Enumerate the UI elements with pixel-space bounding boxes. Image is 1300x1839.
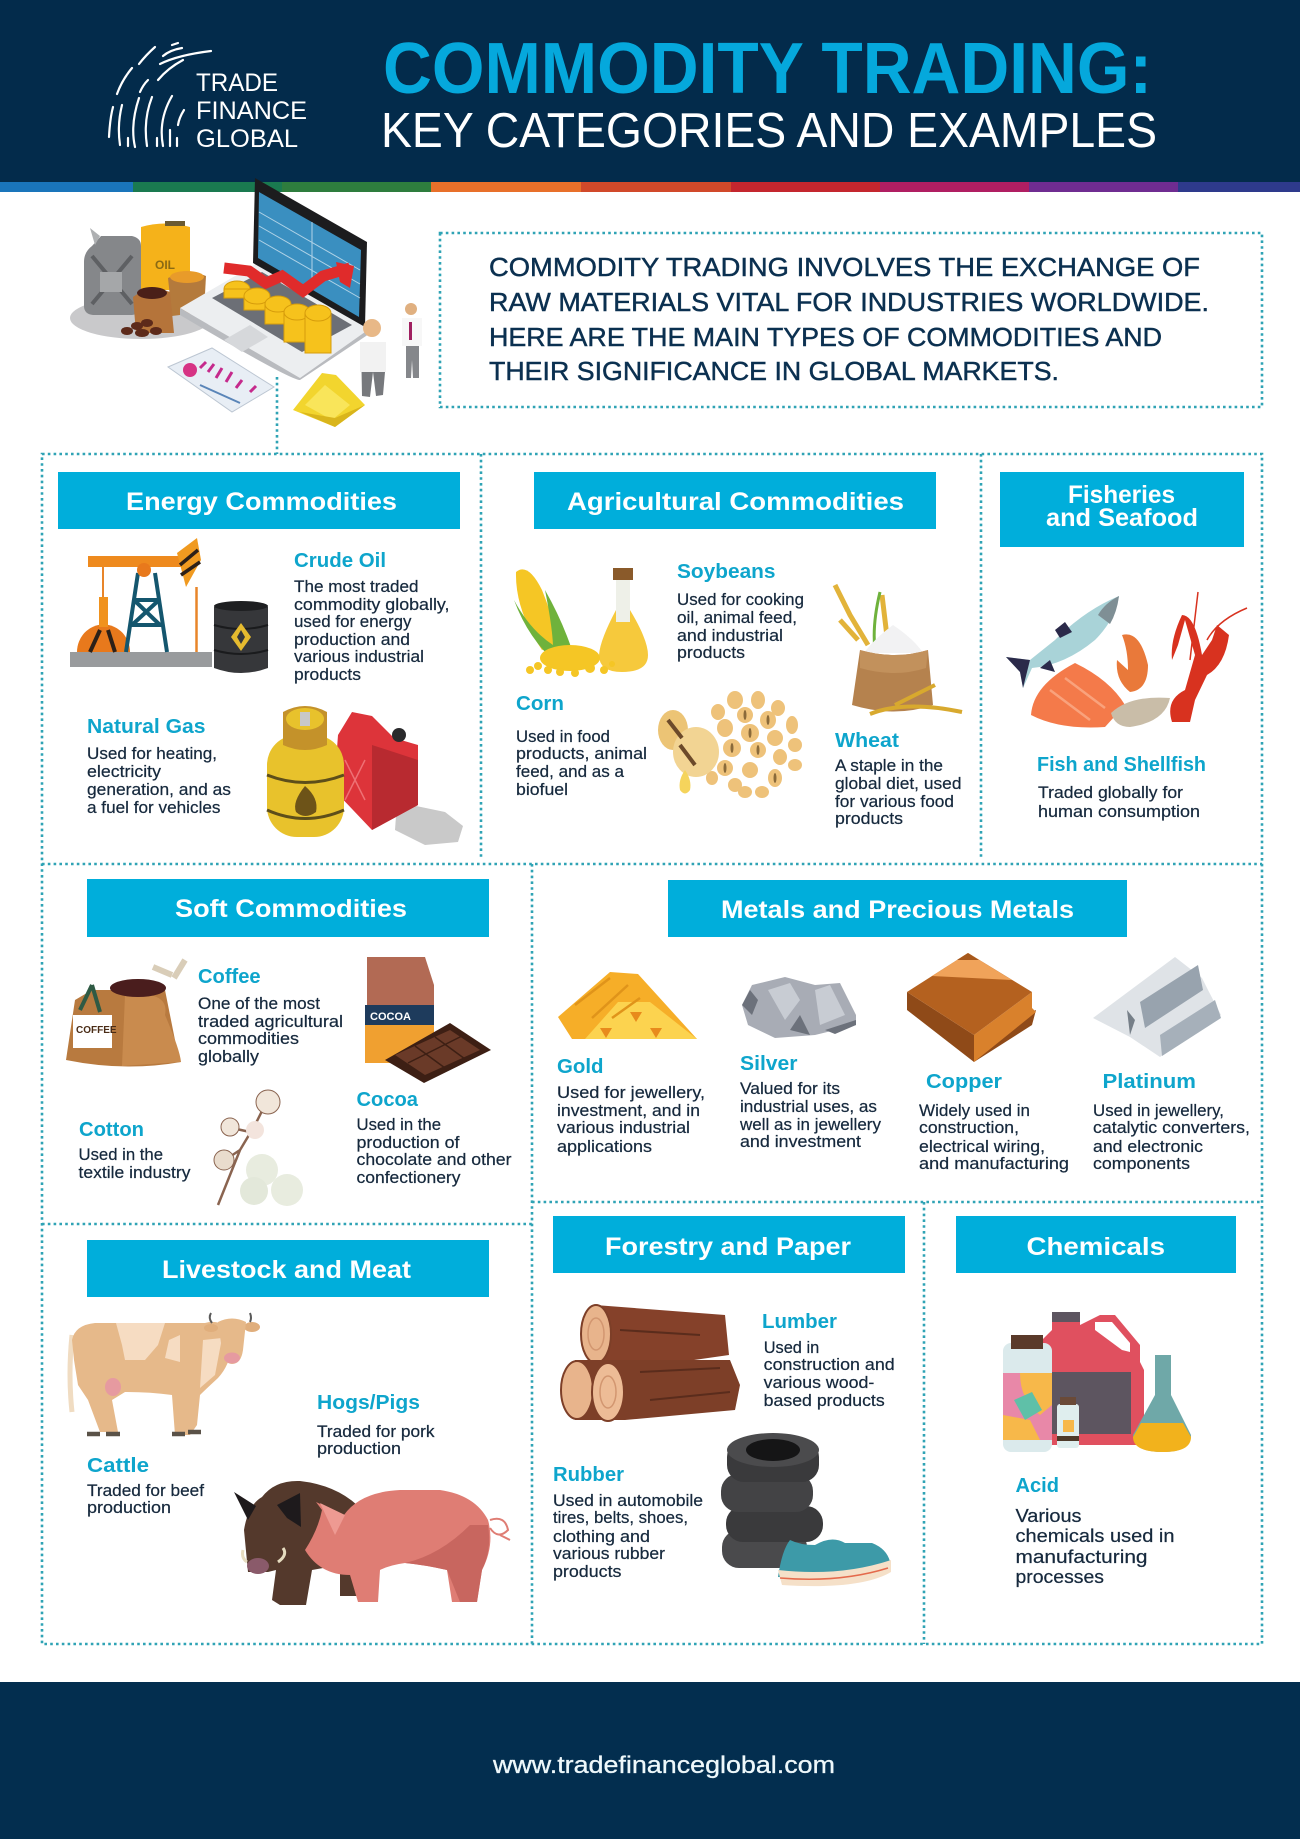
item: cattle: Cattle — [87, 1455, 149, 1477]
icon: fish and shellfish — [1006, 592, 1247, 728]
item: acid: Various — [1016, 1506, 1082, 1526]
item: crude oil — [294, 550, 450, 684]
panel: soft commodities — [42, 864, 532, 1224]
item: cotton: Cotton — [79, 1119, 144, 1141]
icon: boar and pig — [234, 1481, 510, 1605]
item: coffee: traded agricultural — [198, 1013, 343, 1031]
header banner — [0, 0, 1300, 182]
icon: cocoa bag and chocolate — [365, 957, 491, 1083]
item: gold: Used for jewellery, — [557, 1084, 705, 1102]
item: silver — [739, 1053, 882, 1151]
item: platinum — [1093, 1071, 1250, 1173]
item: rubber: tires, belts, shoes, — [553, 1509, 688, 1527]
intro callout: THEIR SIGNIFICANCE IN GLOBAL MARKETS. — [489, 358, 1059, 386]
icon: wheat sack — [835, 585, 962, 714]
heading: fisheries and seafood: Fisheries — [1068, 481, 1175, 509]
item: copper: and manufacturing — [919, 1155, 1069, 1173]
item: acid: manufacturing — [1016, 1547, 1148, 1567]
item: coffee — [198, 966, 343, 1066]
item: fish and shellfish: Traded globally for — [1038, 784, 1184, 802]
item: natural gas: Used for heating, — [87, 745, 217, 763]
item: coffee: One of the most — [198, 995, 320, 1013]
item: lumber — [762, 1311, 895, 1410]
hero illustration: laptop, commodities and traders: OIL — [155, 258, 175, 272]
item: natural gas: Natural Gas — [87, 716, 206, 738]
item: corn — [516, 693, 647, 799]
item: gold: various industrial — [557, 1119, 690, 1137]
item: cattle: Traded for beef — [87, 1482, 204, 1500]
icon: platinum bars — [1093, 957, 1221, 1057]
footer url: www.tradefinanceglobal.com — [492, 1752, 835, 1779]
item: crude oil: production and — [294, 631, 410, 649]
heading: agricultural commodities: Agricultural Commodities — [567, 488, 904, 516]
icon: copper plates — [907, 953, 1036, 1062]
item: corn: products, animal — [516, 745, 647, 763]
item: rubber: clothing and — [553, 1528, 650, 1546]
item: silver: and investment — [740, 1133, 861, 1151]
icon: coffee sack — [66, 960, 185, 1067]
item: natural gas: a fuel for vehicles — [87, 799, 220, 817]
item: hogs and pigs: production — [317, 1440, 401, 1458]
icon: cocoa bag and chocolate: COCOA — [370, 1011, 411, 1023]
logo: Trade Finance Global: TRADE — [196, 69, 278, 97]
panel: forestry and paper — [532, 1202, 924, 1644]
item: platinum: and electronic — [1093, 1138, 1203, 1156]
heading: metals and precious metals — [668, 880, 1127, 937]
item: wheat: A staple in the — [835, 757, 943, 775]
item: platinum: catalytic converters, — [1093, 1119, 1250, 1137]
item: hogs and pigs — [317, 1392, 435, 1458]
title — [381, 29, 1157, 158]
icon: stacked logs — [561, 1305, 740, 1421]
item: lumber: based products — [764, 1392, 885, 1410]
item: cattle: production — [87, 1499, 171, 1517]
item: gold: Gold — [557, 1056, 604, 1078]
item: soybeans: Soybeans — [677, 561, 776, 583]
item: corn: Corn — [516, 693, 564, 715]
heading: metals and precious metals: Metals and Precious Metals — [721, 896, 1074, 924]
title: COMMODITY TRADING: — [383, 29, 1152, 109]
heading: chemicals: Chemicals — [1026, 1233, 1165, 1261]
item: platinum: Used in jewellery, — [1093, 1102, 1224, 1120]
item: cocoa: Cocoa — [356, 1089, 419, 1111]
icon: gold bars — [558, 972, 697, 1039]
item: natural gas — [87, 716, 231, 817]
item: cocoa: confectionery — [356, 1169, 461, 1187]
heading: energy commodities — [58, 472, 460, 529]
item: rubber: products — [553, 1563, 622, 1581]
item: rubber: Rubber — [553, 1464, 624, 1486]
item: lumber: various wood- — [764, 1374, 874, 1392]
icon: cow — [70, 1313, 260, 1435]
item: crude oil: used for energy — [294, 613, 412, 631]
item: coffee: Coffee — [198, 966, 261, 988]
panel: chemicals — [924, 1202, 1262, 1644]
item: copper: Copper — [926, 1071, 1002, 1093]
item: hogs and pigs: Hogs/Pigs — [317, 1392, 420, 1414]
item: wheat: products — [835, 810, 903, 828]
heading: energy commodities: Energy Commodities — [126, 488, 397, 516]
item: acid: chemicals used in — [1016, 1526, 1174, 1546]
intro callout — [440, 233, 1262, 407]
item: natural gas: generation, and as — [87, 781, 231, 799]
item: soybeans: Used for cooking — [677, 591, 804, 609]
item: soybeans — [677, 561, 804, 662]
icon: gas cylinder and fuel can — [267, 706, 463, 845]
panel: agricultural commodities — [481, 454, 981, 864]
item: lumber: Used in — [764, 1339, 819, 1357]
intro callout: RAW MATERIALS VITAL FOR INDUSTRIES WORLDWIDE. — [489, 289, 1209, 317]
heading: livestock and meat — [87, 1240, 489, 1297]
panel: fisheries and seafood — [981, 454, 1262, 864]
logo: Trade Finance Global — [109, 43, 307, 153]
item: platinum: Platinum — [1102, 1071, 1196, 1093]
panel: livestock and meat — [42, 1224, 532, 1644]
heading: fisheries and seafood — [1000, 472, 1244, 547]
heading: fisheries and seafood: and Seafood — [1046, 504, 1198, 532]
icon: soybeans and oil drop — [658, 691, 802, 798]
item: gold — [557, 1056, 705, 1156]
heading: chemicals — [956, 1216, 1236, 1273]
item: coffee: globally — [198, 1048, 260, 1066]
heading: soft commodities: Soft Commodities — [175, 895, 407, 923]
item: soybeans: and industrial — [677, 627, 783, 645]
heading: forestry and paper — [553, 1216, 905, 1273]
item: acid — [1016, 1475, 1174, 1587]
icon: tyres and rubber shoe — [721, 1433, 891, 1586]
item: silver: industrial uses, as — [740, 1098, 877, 1116]
item: natural gas: electricity — [87, 763, 162, 781]
item: fish and shellfish — [1037, 754, 1206, 821]
item: lumber: Lumber — [762, 1311, 837, 1333]
logo: Trade Finance Global: GLOBAL — [196, 125, 298, 153]
heading: agricultural commodities — [534, 472, 936, 529]
item: silver: Valued for its — [740, 1080, 840, 1098]
rainbow stripe — [0, 182, 1300, 192]
item: crude oil: products — [294, 666, 361, 684]
logo: Trade Finance Global: FINANCE — [196, 97, 307, 125]
item: silver: Silver — [740, 1053, 798, 1075]
intro callout: HERE ARE THE MAIN TYPES OF COMMODITIES AND — [489, 324, 1162, 352]
item: acid: processes — [1016, 1567, 1104, 1587]
item: fish and shellfish: Fish and Shellfish — [1037, 754, 1206, 776]
item: wheat: for various food — [835, 793, 954, 811]
item: copper — [919, 1071, 1069, 1173]
item: corn: Used in food — [516, 728, 610, 746]
icon: corn and oil bottle — [514, 568, 648, 677]
item: crude oil: Crude Oil — [294, 550, 386, 572]
footer band — [0, 1682, 1300, 1839]
item: cocoa — [356, 1089, 512, 1187]
item: rubber — [553, 1464, 703, 1581]
hero illustration: laptop, commodities and traders — [70, 178, 422, 427]
panel: metals and precious metals — [532, 864, 1262, 1202]
item: wheat: global diet, used — [835, 775, 962, 793]
item: cocoa: production of — [356, 1134, 460, 1152]
heading: forestry and paper: Forestry and Paper — [605, 1233, 851, 1261]
item: coffee: commodities — [198, 1030, 299, 1048]
item: fish and shellfish: human consumption — [1038, 803, 1200, 821]
item: cotton — [78, 1119, 191, 1182]
item: rubber: various rubber — [553, 1545, 666, 1563]
item: crude oil: various industrial — [294, 648, 424, 666]
item: hogs and pigs: Traded for pork — [317, 1423, 435, 1441]
item: gold: investment, and in — [557, 1102, 700, 1120]
item: copper: construction, — [919, 1119, 1019, 1137]
item: gold: applications — [557, 1138, 652, 1156]
title: KEY CATEGORIES AND EXAMPLES — [381, 104, 1157, 158]
item: copper: Widely used in — [919, 1102, 1030, 1120]
item: acid: Acid — [1016, 1475, 1059, 1497]
item: crude oil: commodity globally, — [294, 596, 450, 614]
panel: energy commodities — [42, 454, 481, 864]
icon: oil pump jack and barrel — [70, 538, 268, 673]
item: wheat — [835, 730, 962, 828]
intro callout: COMMODITY TRADING INVOLVES THE EXCHANGE OF — [489, 254, 1200, 282]
icon: coffee sack: COFFEE — [76, 1025, 117, 1036]
item: corn: feed, and as a — [516, 763, 625, 781]
item: crude oil: The most traded — [294, 578, 418, 596]
icon: silver rock — [742, 977, 856, 1038]
item: cocoa: Used in the — [356, 1116, 441, 1134]
item: corn: biofuel — [516, 781, 568, 799]
item: soybeans: products — [677, 644, 745, 662]
icon: cotton plant — [214, 1090, 303, 1206]
item: copper: electrical wiring, — [919, 1138, 1045, 1156]
item: silver: well as in jewellery — [739, 1116, 882, 1134]
item: wheat: Wheat — [835, 730, 899, 752]
item: lumber: construction and — [764, 1356, 895, 1374]
item: cattle — [87, 1455, 204, 1517]
heading: livestock and meat: Livestock and Meat — [162, 1256, 412, 1284]
item: cotton: Used in the — [78, 1146, 163, 1164]
item: cotton: textile industry — [78, 1164, 191, 1182]
item: cocoa: chocolate and other — [356, 1151, 512, 1169]
item: rubber: Used in automobile — [553, 1492, 703, 1510]
item: soybeans: oil, animal feed, — [677, 609, 797, 627]
heading: soft commodities — [87, 879, 489, 937]
icon: chemical containers — [1003, 1312, 1191, 1452]
item: platinum: components — [1093, 1155, 1190, 1173]
